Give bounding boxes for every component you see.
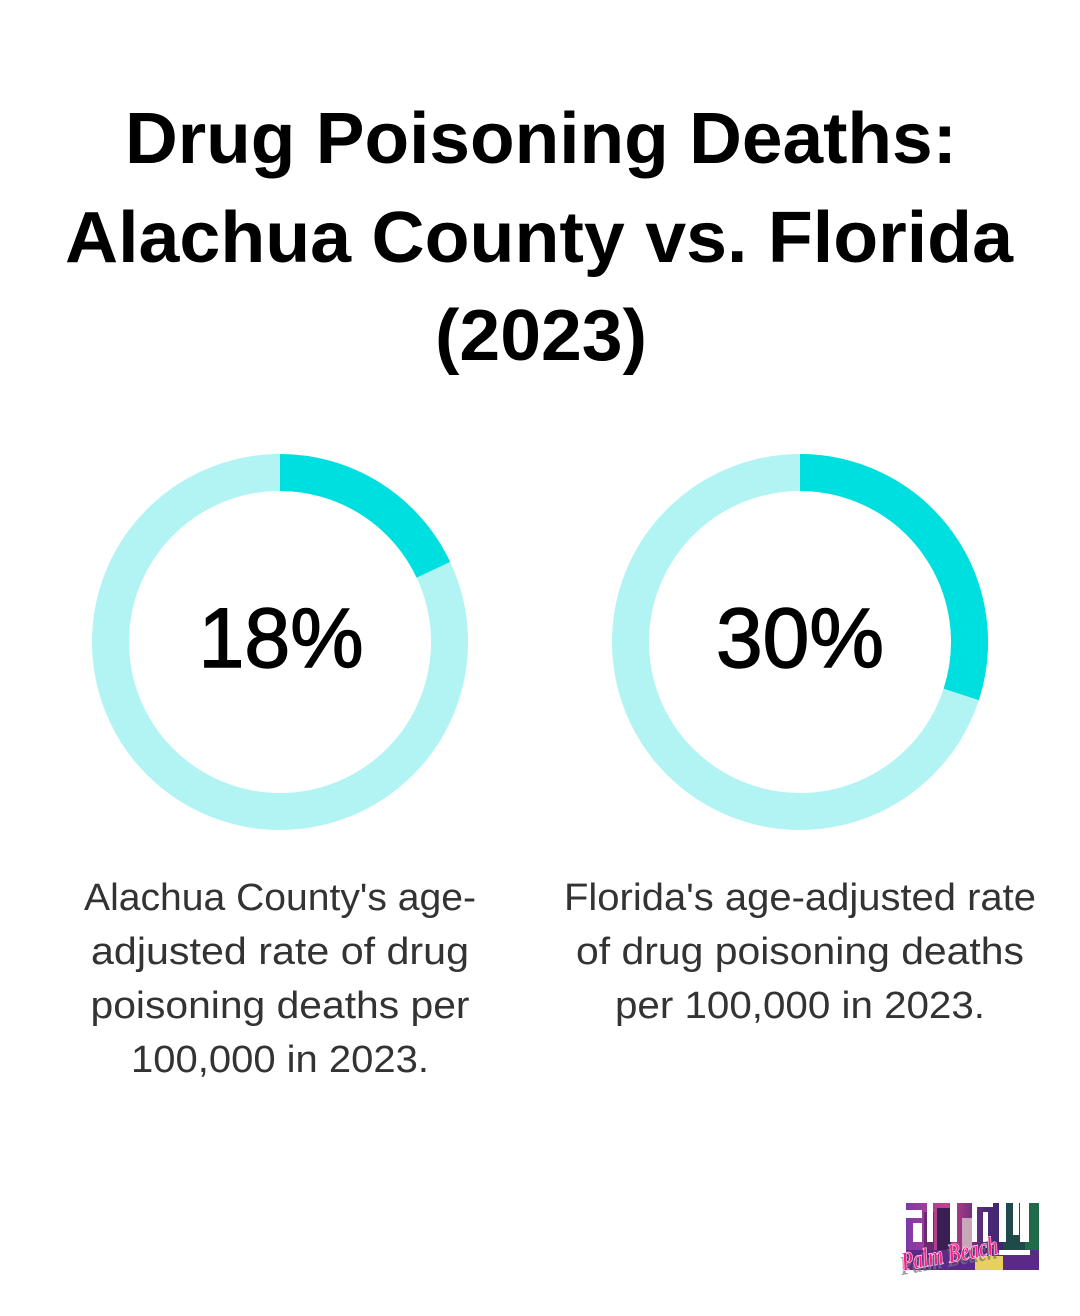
description: Florida: of drug poisoning deaths <box>576 931 1024 973</box>
donut chart: 30% <box>630 472 970 812</box>
description: Alachua County: Alachua County's age- <box>84 877 476 919</box>
description: Alachua County: adjusted rate of drug <box>91 931 469 973</box>
description: Florida: Florida's age-adjusted rate <box>564 877 1036 919</box>
donut chart: 18% <box>110 472 450 812</box>
description: Alachua County <box>84 877 476 1081</box>
value: 18%: 18% <box>198 591 364 685</box>
title: Alachua County vs. Florida <box>65 198 1014 278</box>
title: Drug Poisoning Deaths: <box>125 99 957 179</box>
logo: amity Palm Beach <box>900 1203 1039 1276</box>
value: 30%: 30% <box>716 591 884 685</box>
description: Florida <box>564 877 1036 1027</box>
logo script text: Palm Beach <box>898 1230 1000 1277</box>
description: Alachua County: 100,000 in 2023. <box>131 1039 429 1081</box>
description: Alachua County: poisoning deaths per <box>90 985 470 1027</box>
white cuts forming the letter shapes <box>906 1203 1030 1255</box>
title <box>65 99 1014 376</box>
panel: Alachua County <box>84 472 476 1081</box>
description: Florida: per 100,000 in 2023. <box>615 985 985 1027</box>
logo script text: Palm Beach <box>897 1235 999 1281</box>
title: (2023) <box>435 296 647 376</box>
panel: Florida <box>564 472 1036 1027</box>
